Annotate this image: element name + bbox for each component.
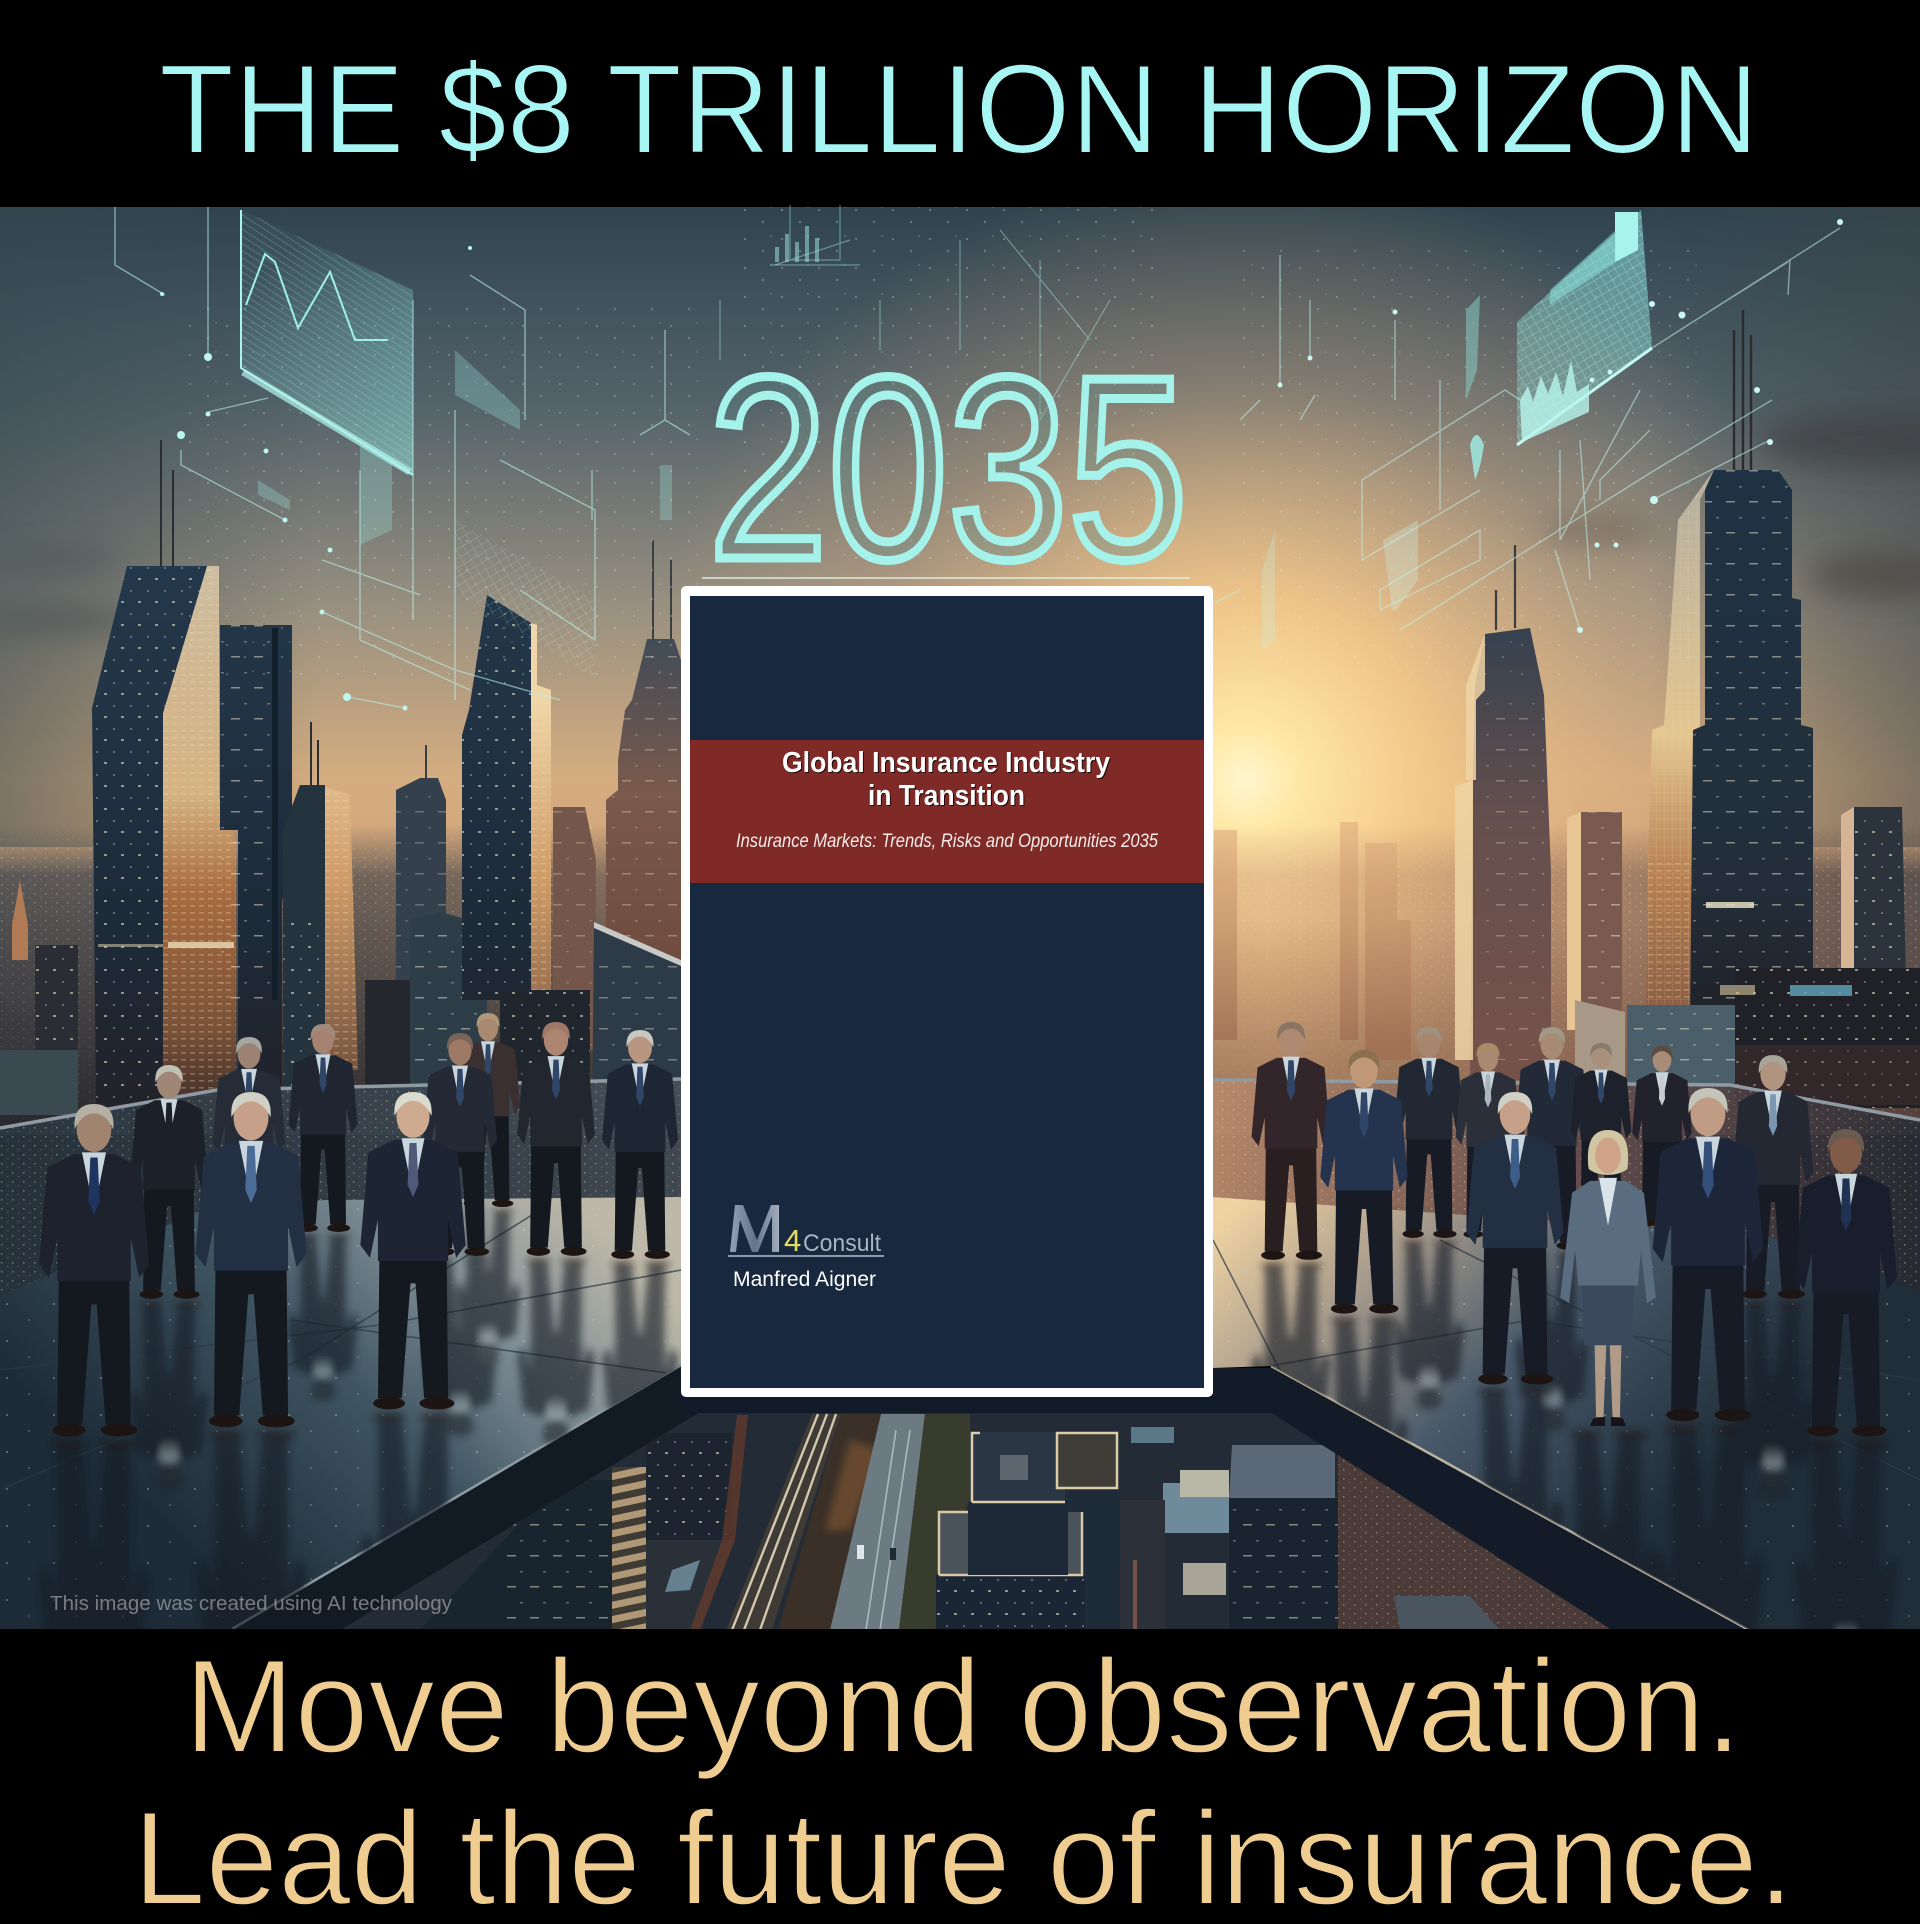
cover frame xyxy=(681,586,1213,1397)
red title band xyxy=(690,740,1204,883)
floating wires xyxy=(115,207,690,708)
clouds xyxy=(0,412,1920,634)
sun glow xyxy=(400,207,1920,1207)
book title: Global Insurance Industry xyxy=(782,747,1110,779)
sparkle field xyxy=(180,300,700,680)
base city xyxy=(340,1413,1612,1630)
tower left 3 xyxy=(283,722,358,1110)
people: left group xyxy=(39,1013,678,1436)
mini chart tiles xyxy=(258,350,672,545)
hologram: left data panels xyxy=(115,207,700,710)
beam left xyxy=(234,1366,698,1630)
logo: M4Consult: Consult xyxy=(803,1230,881,1257)
floor reflections of people xyxy=(41,1206,1896,1629)
scene: sunset skyline xyxy=(0,207,1920,1207)
call to action xyxy=(133,1633,1794,1924)
tree strip 2 xyxy=(899,1414,970,1630)
author: Manfred Aigner xyxy=(733,1267,876,1291)
railing glass left xyxy=(0,1079,681,1295)
logo: M4Consult xyxy=(728,1205,884,1258)
right tower roof and body xyxy=(1229,1445,1335,1498)
book title: in Transition xyxy=(868,780,1025,812)
hologram: top center data xyxy=(720,205,1160,567)
hazy distant towers xyxy=(0,812,1622,1115)
AI caption: This image was created using AI technology xyxy=(50,1592,453,1615)
bottom bar xyxy=(0,1629,1920,1924)
tower left 5 xyxy=(462,595,596,1100)
right buildings xyxy=(1131,1427,1174,1443)
lower right buildings xyxy=(1575,1000,1625,1090)
warm districts xyxy=(1338,1440,1612,1630)
title bar xyxy=(0,0,1920,208)
title: THE $8 TRILLION HORIZON xyxy=(159,38,1759,180)
railing glass right xyxy=(1213,1080,1920,1290)
tower right 3 xyxy=(1575,807,1920,1108)
center building xyxy=(936,1432,1120,1630)
beam right xyxy=(1213,1368,1749,1630)
highway with light trails xyxy=(726,1414,841,1630)
glass floor right xyxy=(1213,1197,1920,1630)
tower right 1: central xyxy=(1455,545,1551,1080)
tower right 2: tallest xyxy=(1646,310,1813,1020)
tower left 1 xyxy=(92,440,236,1110)
tree strip xyxy=(778,1414,881,1630)
book cover xyxy=(681,586,1213,1397)
glass floor left xyxy=(0,1197,681,1630)
cover background xyxy=(690,596,1204,1388)
terrace: railings and glass floor xyxy=(0,1079,1920,1630)
city below terrace xyxy=(232,1365,1749,1630)
central road xyxy=(830,1414,925,1630)
hologram: right data panels xyxy=(1200,210,1843,680)
tower left 6 xyxy=(592,540,681,1130)
woman in grey suit xyxy=(1560,1130,1656,1426)
call to action: Move beyond observation. xyxy=(184,1633,1742,1781)
tower left 2 xyxy=(220,625,292,1110)
logo: M4Consult: 4 xyxy=(784,1223,801,1258)
sky xyxy=(0,207,1920,1107)
distant city band xyxy=(0,825,1920,1135)
people: right group xyxy=(1252,1022,1897,1436)
year 2035: 2035 xyxy=(708,324,1188,614)
book title xyxy=(782,747,1110,812)
left chart panel xyxy=(241,210,413,475)
left buildings xyxy=(646,1433,732,1540)
book subtitle: Insurance Markets: Trends, Risks and Opportunities 2035 xyxy=(736,831,1158,852)
floor seams xyxy=(0,1210,1920,1490)
tower left 4 xyxy=(365,745,487,1110)
